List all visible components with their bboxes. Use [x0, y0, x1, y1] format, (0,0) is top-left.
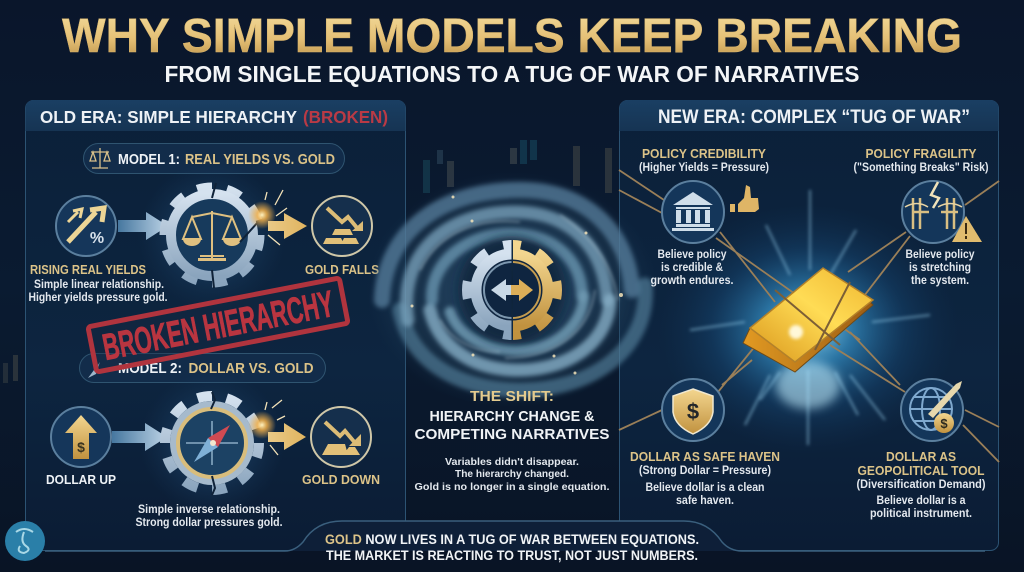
belief text: the system. [911, 275, 969, 287]
subheading: (Strong Dollar = Pressure) [639, 465, 771, 477]
belief text: Believe policy [658, 249, 727, 261]
icon: compass [88, 362, 100, 378]
icon: broken bridge [902, 181, 964, 243]
pill text: model 2: DOLLAR VS. GOLD [188, 361, 314, 377]
label: rising real yields: RISING REAL YIELDS [30, 263, 146, 277]
node: policy credibility [639, 147, 769, 287]
title: WHY SIMPLE MODELS KEEP BREAKING [62, 10, 962, 63]
subheading: (Higher Yields = Pressure) [639, 162, 769, 174]
heading: policy credibility: POLICY CREDIBILITY [642, 147, 767, 161]
icon: split gear [458, 236, 566, 344]
arrow: to gear [118, 212, 168, 240]
panel header: new era [620, 100, 998, 131]
pill: model 2 [80, 354, 326, 382]
ropes over bar [775, 282, 850, 350]
icon: dollar up [51, 407, 111, 467]
callout text: THE MARKET IS REACTING TO TRUST, NOT JUST NUMBERS. [326, 548, 698, 563]
icon: globe and dollar: $ [940, 416, 948, 431]
heading: old era: OLD ERA: SIMPLE HIERARCHY [40, 107, 297, 127]
faint candlesticks backdrop [3, 140, 612, 383]
heading: geopolitical tool: DOLLAR AS [886, 450, 956, 464]
icon: shield [662, 379, 724, 441]
subheading: (Diversification Demand) [856, 479, 986, 491]
description: the shift: Variables didn't disappear. [445, 456, 579, 468]
heading: safe haven: DOLLAR AS SAFE HAVEN [630, 450, 780, 464]
light rays [690, 190, 930, 445]
swirl: center vortex [367, 172, 657, 408]
gold bar [743, 293, 873, 372]
callout text: GOLD NOW LIVES IN A TUG OF WAR BETWEEN EQUATIONS. [325, 532, 719, 547]
description: model 2: Simple inverse relationship. [138, 504, 280, 516]
icon: rising yields [56, 196, 116, 256]
icon: bank [662, 181, 724, 243]
description: model 2: Strong dollar pressures gold. [136, 517, 282, 529]
panel: old era [26, 100, 406, 550]
icon: shield: $ [687, 399, 699, 424]
subtitle: FROM SINGLE EQUATIONS TO A TUG OF WAR OF NARRATIVES [164, 61, 860, 87]
description: the shift: The hierarchy changed. [455, 468, 569, 480]
belief text: Believe dollar is a clean [646, 482, 764, 494]
icon: gold falls [312, 196, 372, 256]
heading: geopolitical tool: GEOPOLITICAL TOOL [858, 464, 985, 478]
gear glow [140, 371, 284, 515]
callout: bottom banner [45, 521, 985, 563]
pill text: model 1: MODEL 1: [118, 152, 180, 168]
arrow: to compass gear [112, 423, 167, 451]
tug of war center: glow and gold bar [619, 170, 999, 462]
model 1 flow [28, 144, 379, 309]
label: gold down: GOLD DOWN [302, 473, 380, 487]
node: dollar as geopolitical tool [856, 379, 986, 520]
subheading: ("Something Breaks" Risk) [854, 162, 989, 174]
spark [248, 400, 285, 455]
description: model 1: Simple linear relationship. [34, 279, 164, 291]
belief text: is stretching [909, 262, 971, 274]
model 2 flow [46, 354, 380, 529]
belief text: Believe dollar is a [876, 495, 966, 507]
arrow: to gold down [268, 423, 306, 450]
gear glow [138, 161, 286, 309]
heading: policy fragility: POLICY FRAGILITY [866, 147, 977, 161]
icon: cracked gear with scales [164, 183, 260, 288]
node: dollar as safe haven [630, 379, 780, 507]
pill: model 1 [84, 144, 344, 174]
icon: cracked gear with compass [165, 392, 259, 495]
description: model 1: Higher yields pressure gold. [28, 292, 168, 304]
pill text: model 2: MODEL 2: [118, 361, 182, 377]
description: the shift: Gold is no longer in a single equation. [414, 481, 610, 493]
belief text: is credible & [661, 262, 723, 274]
node: policy fragility [854, 147, 989, 287]
belief text: political instrument. [870, 508, 972, 520]
belief text: growth endures. [650, 275, 734, 287]
spark [248, 190, 287, 245]
panel: new era [620, 100, 998, 550]
stamp: broken hierarchy: BROKEN HIERARCHY [99, 283, 337, 368]
stamp: broken hierarchy [88, 278, 348, 372]
heading: the shift: COMPETING NARRATIVES [414, 426, 610, 443]
icon: gold down [311, 407, 371, 467]
icon: scales [90, 148, 110, 168]
heading tag: broken: (BROKEN) [303, 107, 388, 127]
icon: warning [952, 216, 982, 242]
heading: the shift: THE SHIFT: [470, 388, 554, 405]
panel header: old era [26, 100, 406, 131]
pill text: model 1: REAL YIELDS VS. GOLD [185, 152, 335, 168]
belief text: Believe policy [906, 249, 975, 261]
logo [5, 521, 45, 561]
icon: globe and dollar [901, 379, 963, 441]
ropes [619, 170, 999, 462]
arrow: to gold falls [268, 213, 307, 239]
icon: rising yields: % [90, 230, 104, 247]
belief text: safe haven. [676, 495, 734, 507]
icon: thumbs up [730, 185, 759, 212]
icon: dollar up: $ [77, 439, 85, 455]
label: dollar up: DOLLAR UP [46, 473, 116, 487]
label: gold falls: GOLD FALLS [305, 263, 379, 277]
heading: new era: NEW ERA: COMPLEX “TUG OF WAR” [658, 107, 970, 128]
heading: the shift: HIERARCHY CHANGE & [430, 408, 595, 425]
